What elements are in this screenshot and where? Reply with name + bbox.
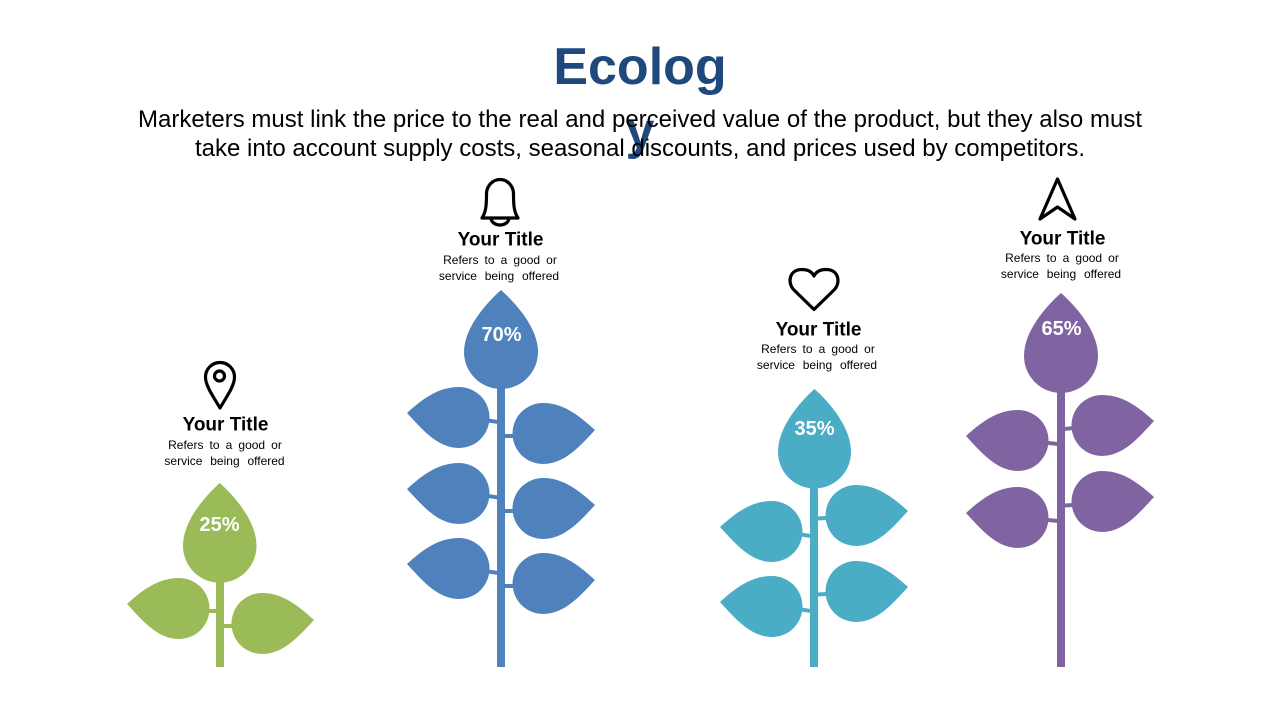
plant: teal xyxy=(720,389,908,667)
plant: green xyxy=(127,483,314,667)
text block: description: service being offered xyxy=(439,269,559,283)
text block: description: Refers to a good or xyxy=(443,253,557,267)
text block: description: Refers to a good or xyxy=(168,438,282,452)
plant: purple xyxy=(966,293,1154,667)
value: 65%: 65% xyxy=(1041,318,1082,340)
text block: description: Refers to a good or xyxy=(1005,251,1119,265)
panel: purple plant 65% xyxy=(966,179,1154,667)
value: 35%: 35% xyxy=(794,418,835,440)
panel: teal plant 35% xyxy=(720,270,908,667)
heading: your title: Your Title xyxy=(183,414,268,436)
heading: your title: Your Title xyxy=(776,320,861,340)
text block: description: Refers to a good or xyxy=(761,342,875,356)
icon: heart xyxy=(790,270,838,310)
text block: description: service being offered xyxy=(164,454,285,468)
value: 70%: 70% xyxy=(481,324,522,346)
text block: intro paragraph: take into account supply costs, seasonal discounts, and prices used by competitors. xyxy=(195,135,1085,162)
icon: map pin xyxy=(206,363,234,408)
text block: intro paragraph: Marketers must link the price to the real and perceived value of the product, but they also must xyxy=(138,106,1142,133)
title: Ecology xyxy=(553,38,727,160)
text block: description: service being offered xyxy=(1001,267,1121,281)
panel: green plant 25% xyxy=(127,363,314,667)
text block: description: service being offered xyxy=(757,358,877,372)
panel: blue plant 70% xyxy=(407,180,595,667)
icon: navigation arrow xyxy=(1040,179,1075,219)
value: 25%: 25% xyxy=(199,514,240,536)
icon: bell xyxy=(482,180,518,225)
heading: your title: Your Title xyxy=(458,230,543,250)
plant: blue xyxy=(407,290,595,667)
heading: your title: Your Title xyxy=(1020,228,1105,250)
text block: intro paragraph xyxy=(138,106,1142,162)
